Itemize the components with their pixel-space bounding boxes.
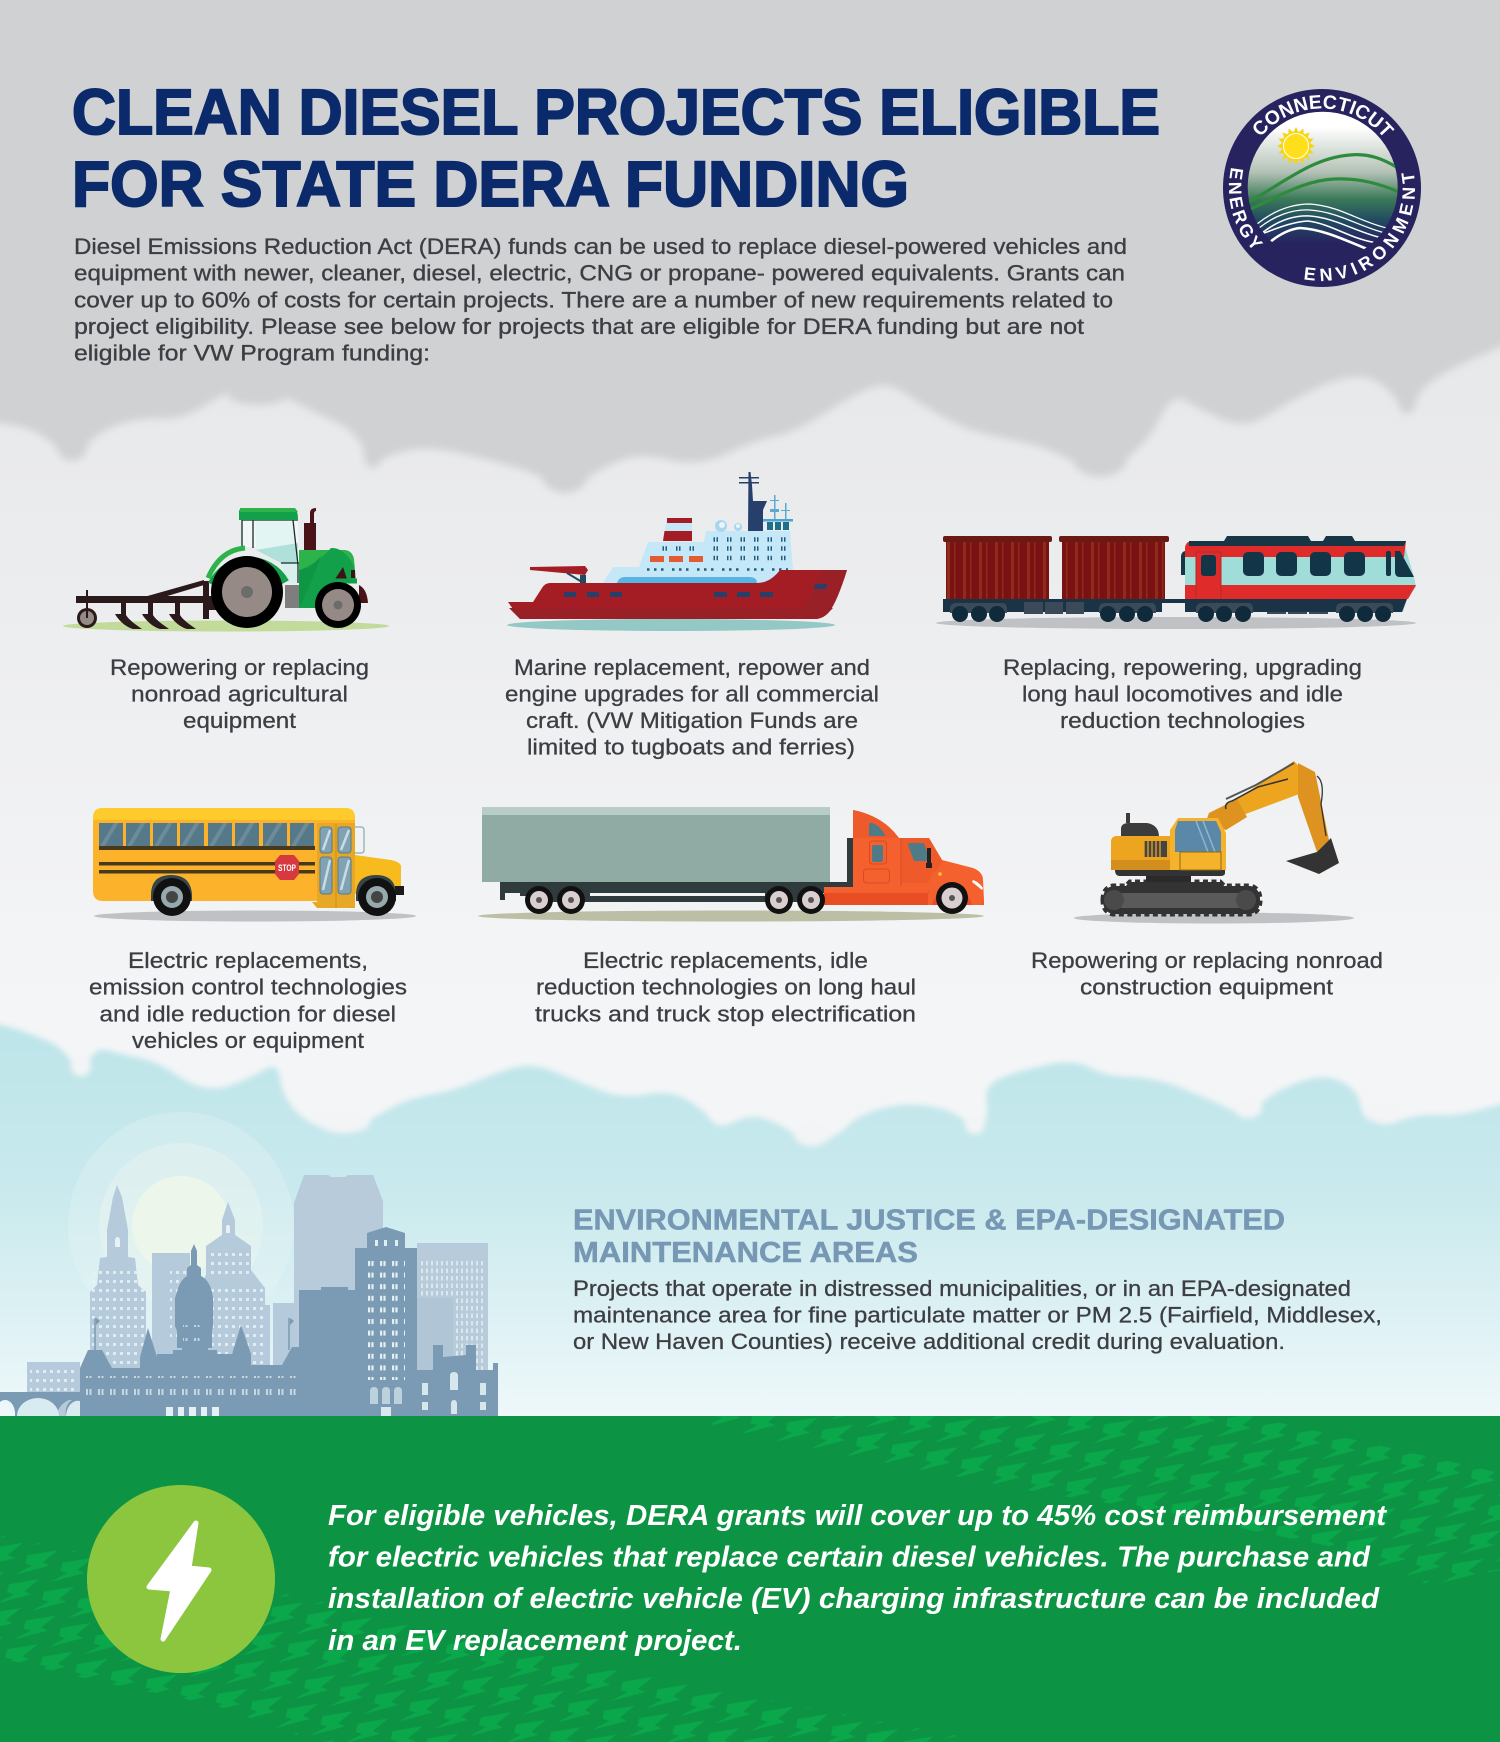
title: CLEAN DIESEL PROJECTS ELIGIBLE	[72, 76, 1160, 148]
caption: marine	[505, 655, 879, 760]
caption: electric replacements bus: and idle reduction for diesel	[100, 1001, 396, 1026]
caption: electric replacements bus	[89, 948, 407, 1053]
icon: semi truck	[478, 807, 984, 922]
caption: marine: Marine replacement, repower and	[514, 655, 870, 680]
caption: long haul trucks: trucks and truck stop electrification	[535, 1001, 916, 1026]
caption: electric replacements bus: vehicles or equipment	[132, 1028, 364, 1053]
intro paragraph: cover up to 60% of costs for certain projects. There are a number of new requirements related to	[74, 287, 1113, 312]
title: FOR STATE DERA FUNDING	[72, 148, 909, 220]
illustration: sun and city skyline	[0, 1112, 498, 1425]
caption: marine: craft. (VW Mitigation Funds are	[526, 708, 858, 733]
caption: agricultural equipment: Repowering or replacing	[110, 655, 369, 680]
icon: school bus: STOP	[278, 863, 296, 873]
caption: long haul trucks	[535, 948, 916, 1026]
title	[72, 76, 1160, 220]
intro paragraph: project eligibility. Please see below for projects that are eligible for DERA funding but are not	[74, 314, 1084, 339]
icon: tractor with plow	[63, 508, 389, 632]
icon: lightning bolt circle	[87, 1485, 275, 1673]
smoke cloud: grey top area	[0, 0, 1500, 493]
callout: EV reimbursement text: For eligible vehicles, DERA grants will cover up to 45% cost reimbursement	[328, 1500, 1387, 1532]
caption: construction equipment	[1031, 948, 1383, 1000]
caption: electric replacements bus: emission control technologies	[89, 975, 407, 1000]
heading: environmental justice	[573, 1204, 1285, 1269]
intro paragraph: Diesel Emissions Reduction Act (DERA) funds can be used to replace diesel-powered vehicles and	[74, 234, 1127, 259]
caption: construction equipment: Repowering or replacing nonroad	[1031, 948, 1383, 973]
logo: Connecticut Energy Environment	[1223, 89, 1421, 287]
callout: EV reimbursement text: installation of electric vehicle (EV) charging infrastructure can be included	[328, 1583, 1380, 1615]
icon: ship	[507, 472, 847, 631]
callout: EV reimbursement text	[328, 1500, 1387, 1657]
intro paragraph: eligible for VW Program funding:	[74, 341, 430, 366]
icon: excavator	[1074, 761, 1354, 924]
body text: environmental justice	[573, 1276, 1382, 1354]
pattern: lightning bolts	[0, 1416, 1500, 1742]
caption: agricultural equipment: equipment	[183, 708, 296, 733]
caption: locomotives: reduction technologies	[1060, 708, 1305, 733]
intro paragraph: equipment with newer, cleaner, diesel, electric, CNG or propane- powered equivalents. Grants can	[74, 261, 1125, 286]
heading: environmental justice: MAINTENANCE AREAS	[573, 1237, 918, 1269]
body text: environmental justice: Projects that operate in distressed municipalities, or in an EPA-designated	[573, 1276, 1351, 1301]
intro paragraph	[74, 234, 1127, 366]
panel: green footer	[0, 1416, 1500, 1742]
caption: electric replacements bus: Electric replacements,	[128, 948, 368, 973]
sky area with cloud edge	[0, 1020, 1500, 1440]
icon: school bus	[93, 808, 416, 922]
icon: freight train and locomotive	[936, 536, 1416, 629]
body text: environmental justice: maintenance area for fine particulate matter or PM 2.5 (Fairfield, Middlesex,	[573, 1302, 1382, 1328]
heading: environmental justice: ENVIRONMENTAL JUSTICE & EPA-DESIGNATED	[573, 1204, 1285, 1236]
body text: environmental justice: or New Haven Counties) receive additional credit during evaluation.	[573, 1329, 1285, 1354]
caption: locomotives: Replacing, repowering, upgrading	[1003, 655, 1362, 680]
caption: long haul trucks: reduction technologies on long haul	[536, 975, 916, 1000]
caption: agricultural equipment	[110, 655, 369, 733]
caption: locomotives	[1003, 655, 1362, 733]
callout: EV reimbursement text: for electric vehicles that replace certain diesel vehicles. The purchase and	[328, 1542, 1371, 1574]
logo: Connecticut Energy Environment: ENERGY	[1228, 168, 1264, 248]
caption: locomotives: long haul locomotives and idle	[1022, 682, 1343, 707]
callout: EV reimbursement text: in an EV replacement project.	[328, 1625, 742, 1657]
caption: marine: limited to tugboats and ferries)	[527, 735, 855, 760]
caption: agricultural equipment: nonroad agricultural	[131, 682, 348, 707]
logo: Connecticut Energy Environment: CONNECTICUT	[1253, 95, 1394, 136]
logo: Connecticut Energy Environment: ENVIRONMENT	[1304, 173, 1416, 282]
caption: long haul trucks: Electric replacements, idle	[583, 948, 868, 973]
caption: marine: engine upgrades for all commercial	[505, 682, 879, 707]
caption: construction equipment: construction equipment	[1080, 975, 1333, 1000]
